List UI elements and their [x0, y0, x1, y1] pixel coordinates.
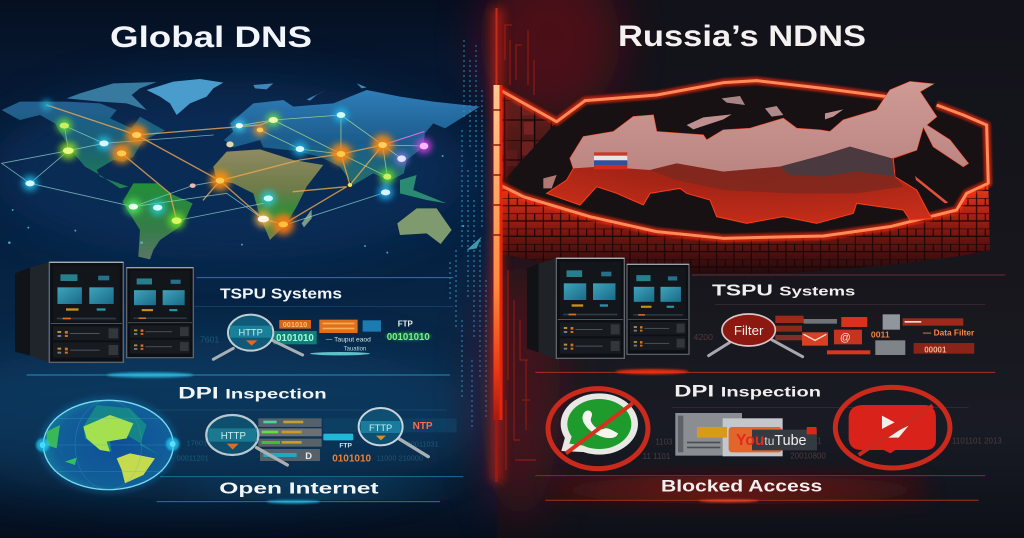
DPI packet inspection strip: FTP	[339, 443, 352, 450]
icon: HTTP magnifier: HTTP	[238, 328, 263, 338]
heading: TSPU Systems: TSPU Systems	[220, 286, 342, 302]
data filter strip: 00001	[924, 345, 947, 354]
title: Russia's NDNS: Russia’s NDNS	[618, 20, 866, 53]
DPI packet inspection strip: 17601	[187, 439, 207, 448]
heading: DPI Inspection: DPI Inspection	[674, 382, 821, 401]
DPI packet inspection strip	[177, 408, 457, 465]
icon: browser with YouTube tag	[675, 413, 817, 456]
heading: Blocked Access: Blocked Access	[661, 477, 822, 496]
digital wall around Russia map	[500, 81, 990, 273]
icon: browser with YouTube tag: YoutuTube	[736, 432, 807, 449]
data filter strip: 4200	[694, 332, 713, 342]
faint binary digits: 1103	[655, 437, 673, 446]
panel: Russia's NDNS (right side)	[480, 0, 1024, 538]
icon: HTTP magnifier	[206, 415, 258, 455]
heading: DPI Inspection: DPI Inspection	[178, 383, 327, 402]
title: Global DNS: Global DNS	[110, 21, 312, 54]
faint binary digits: 1101101 2013	[952, 437, 1002, 446]
faint binary digits: 1	[817, 436, 822, 445]
HTTP inspection strip: Tauation	[344, 347, 366, 353]
map: Russia	[543, 82, 968, 223]
glowing red divider	[491, 8, 503, 483]
data filter strip	[694, 314, 975, 357]
icon: server racks	[527, 258, 689, 359]
HTTP inspection strip: — Tauput eaod	[326, 337, 371, 344]
HTTP inspection strip: FTP	[398, 320, 414, 329]
DPI packet inspection strip: 11000 210000	[377, 453, 423, 462]
HTTP inspection strip	[200, 315, 432, 359]
DPI packet inspection strip: D	[305, 451, 312, 461]
icon: FTP magnifier	[359, 408, 403, 445]
row: TSPU filter and blocked access panel	[527, 258, 1005, 502]
icon: server racks	[15, 262, 193, 362]
faint binary digits: 11 1101	[643, 452, 671, 461]
DPI packet inspection strip: 00011031	[407, 439, 439, 448]
HTTP inspection strip: 7601	[200, 334, 219, 344]
data stream column	[450, 40, 486, 430]
heading: TSPU Systems: TSPU Systems	[712, 283, 855, 300]
icon: FTP magnifier: FTTP	[369, 423, 392, 433]
world map with network nodes	[2, 79, 482, 259]
row: TSPU systems and DPI panel	[15, 262, 467, 504]
data filter strip: 0011	[871, 330, 890, 340]
icon: blocked YouTube	[835, 387, 950, 468]
data filter strip: @	[840, 332, 851, 344]
icon: Filter magnifier: Filter	[734, 323, 764, 338]
HTTP inspection strip: 0101010	[276, 333, 314, 344]
icon: blocked WhatsApp	[548, 389, 648, 469]
DPI packet inspection strip: 00011201	[177, 453, 209, 462]
faint binary digits: 20010800	[790, 451, 826, 460]
panel: Global DNS (left side)	[0, 0, 497, 538]
DPI packet inspection strip: NTP	[413, 421, 433, 432]
DPI packet inspection strip: 0101010	[332, 454, 372, 465]
data filter strip: — Data Filter	[923, 328, 975, 338]
HTTP inspection strip: 001010	[283, 320, 307, 329]
HTTP inspection strip: 00101010	[387, 332, 430, 343]
circuit traces	[505, 25, 536, 470]
icon: Russian flag	[594, 152, 627, 169]
faint binary digits	[643, 436, 1002, 461]
heading: Open Internet: Open Internet	[219, 480, 380, 497]
icon: globe	[36, 397, 179, 493]
icon: HTTP magnifier: HTTP	[221, 431, 246, 442]
icon: HTTP magnifier	[228, 315, 273, 351]
icon: Filter magnifier	[722, 314, 775, 346]
